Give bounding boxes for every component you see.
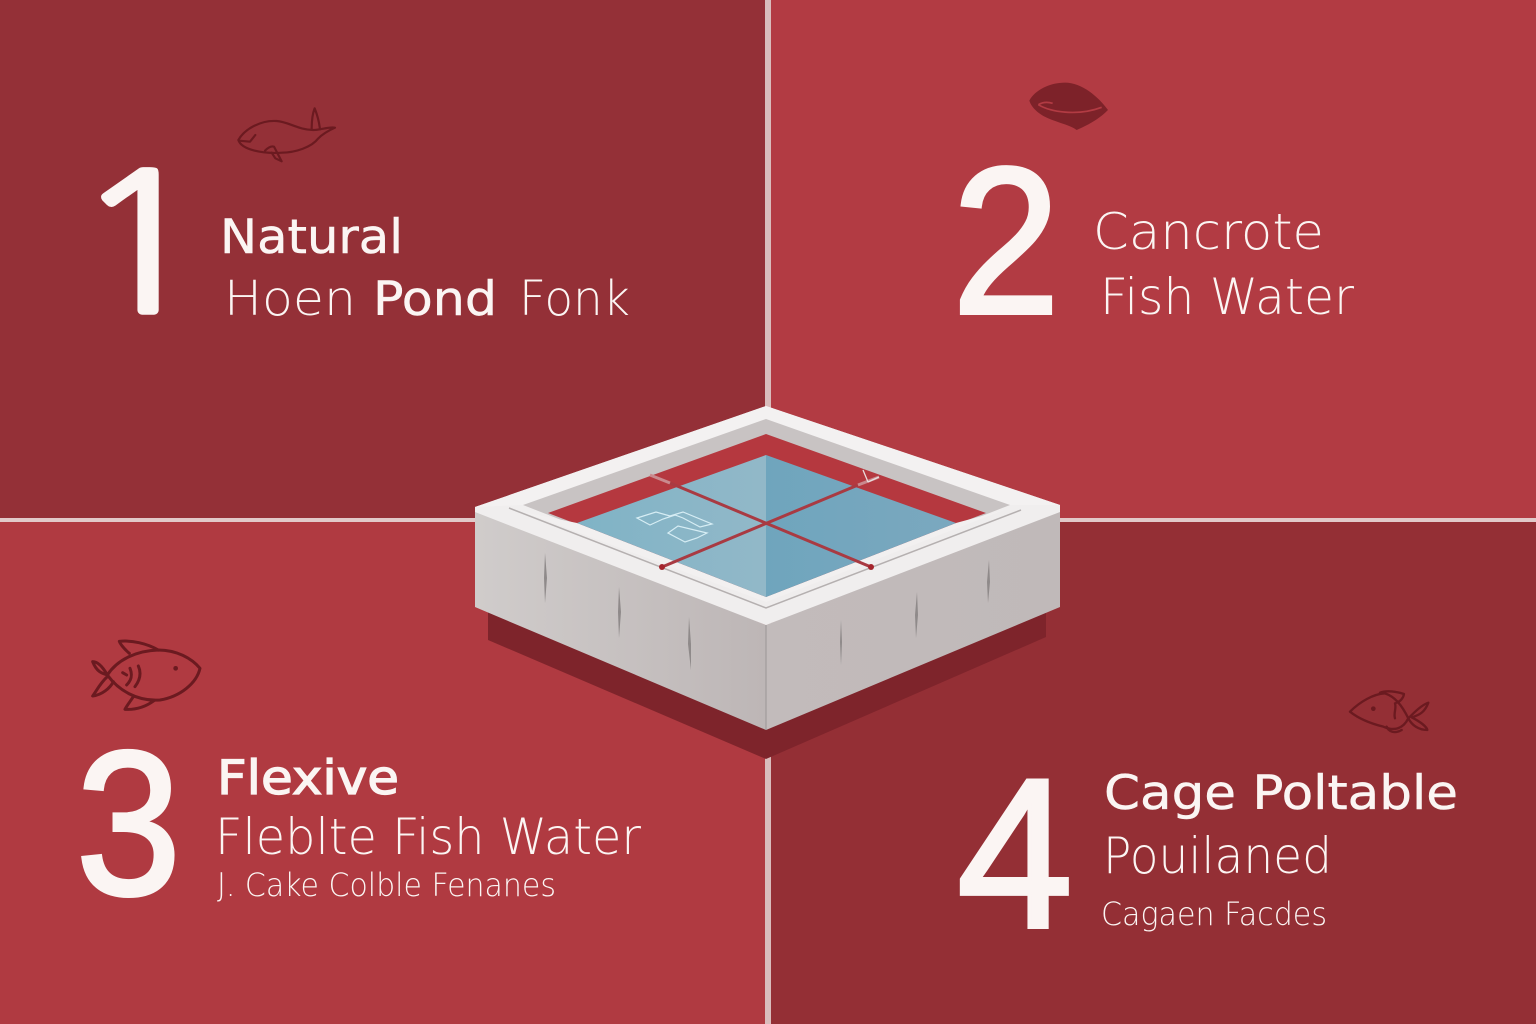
icon: whale [238, 108, 335, 161]
icon: shell [1029, 83, 1108, 130]
inner wall [523, 419, 1010, 600]
fish outline in water [637, 512, 712, 542]
panel 3: flexible tank [0, 520, 766, 1024]
rim [475, 406, 1060, 625]
subheading: Pouilaned: Pouilaned [1103, 827, 1332, 885]
subheading: Hoen Pond Fonk [224, 271, 630, 327]
heading: Flexive: Flexive [217, 751, 399, 806]
wall: left [475, 507, 766, 730]
tank shadow [488, 610, 1046, 759]
heading: Cage Poltable: Cage Poltable [1104, 766, 1458, 821]
small white mark [863, 470, 879, 482]
subheading: Hoen Pond Fonk: Fonk [519, 271, 630, 327]
front lip [509, 508, 1021, 608]
subheading: Hoen Pond Fonk: Pond [373, 272, 497, 327]
subheading: Fleblte Fish Water: Fleblte Fish Water [215, 808, 641, 866]
caption: Cagaen Facdes: Cagaen Facdes [1101, 895, 1327, 933]
icon: small fish [1350, 691, 1428, 732]
water [577, 455, 956, 597]
wall: right [766, 505, 1060, 730]
red cross lines [650, 475, 879, 570]
panel 1: natural pond [0, 0, 766, 520]
heading: Cancrote: Cancrote [1093, 203, 1324, 261]
subheading: Fish Water: Fish Water [1100, 268, 1354, 326]
number 3: 3 [76, 709, 181, 938]
panel 2: concrete tank [766, 0, 1536, 520]
isometric fish tank [475, 406, 1060, 759]
wall cracks [544, 553, 990, 670]
number 4: 4 [957, 735, 1073, 973]
subheading: Hoen Pond Fonk: Hoen [224, 271, 356, 327]
panel 4: portable cage [766, 520, 1536, 1024]
number 2: 2 [952, 125, 1060, 358]
icon: fish outline [93, 641, 200, 709]
caption: Cake Colble Fenanes: J. Cake Colble Fenanes [217, 866, 556, 904]
number 1: 1 [71, 147, 211, 340]
heading: Natural: Natural [220, 210, 403, 265]
tank floor: red [548, 434, 986, 597]
